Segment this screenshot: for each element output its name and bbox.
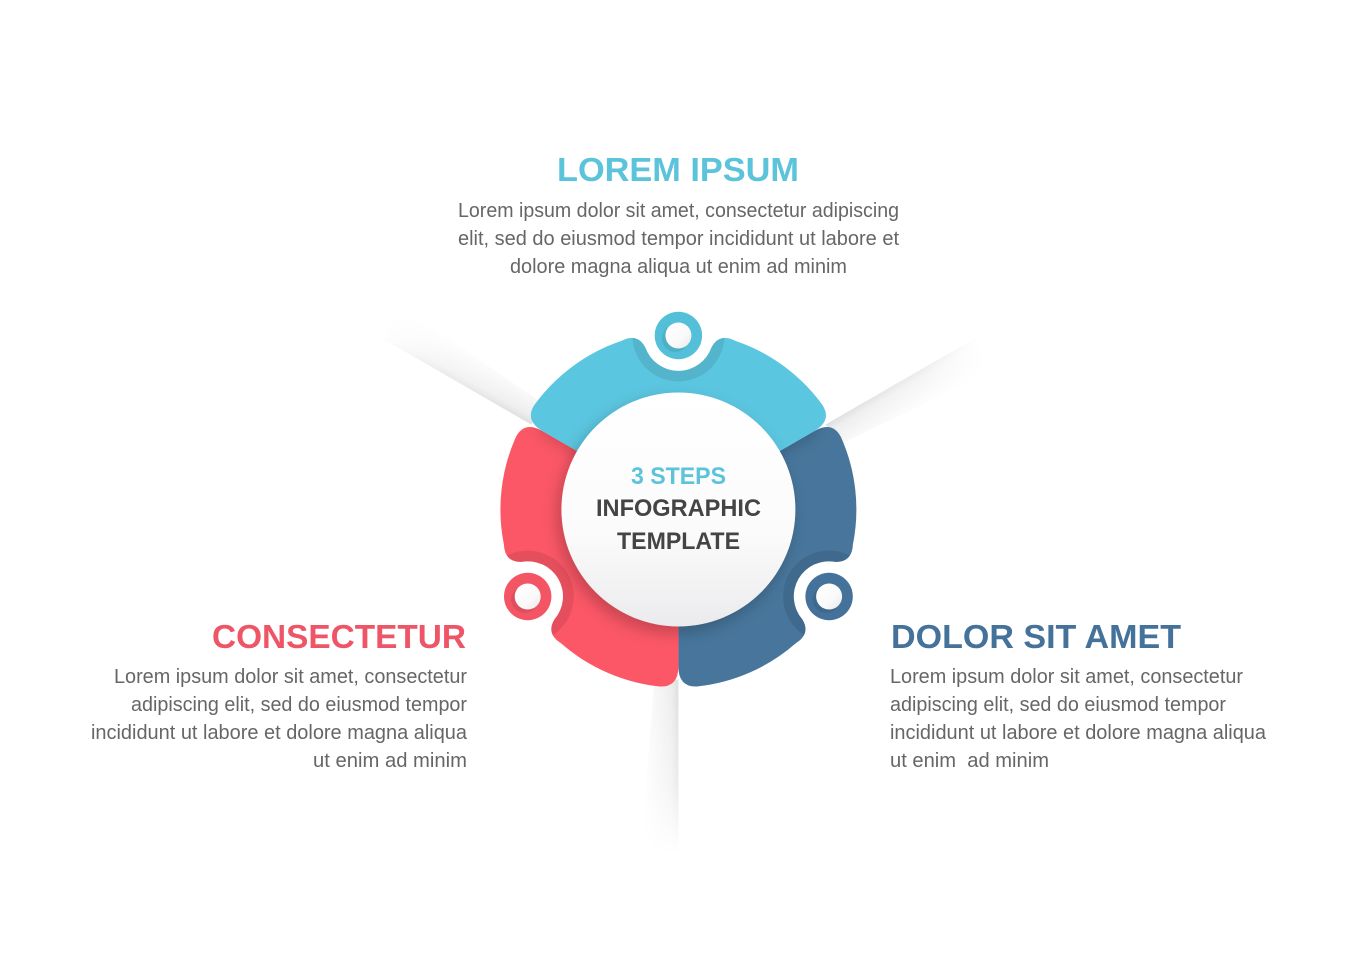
heading and description: dolor sit amet: adipiscing elit, sed do eiusmod tempor — [890, 694, 1226, 716]
ring icon: cyan — [655, 312, 702, 359]
center text: 3 STEPS — [631, 463, 726, 490]
heading and description: dolor sit amet: DOLOR SIT AMET — [891, 618, 1181, 655]
heading and description: lorem ipsum: dolore magna aliqua ut enim ad minim — [510, 256, 847, 278]
center circle — [561, 392, 795, 626]
heading and description: consectetur: adipiscing elit, sed do eiusmod tempor — [131, 694, 467, 716]
heading and description: dolor sit amet — [890, 618, 1267, 772]
heading and description: lorem ipsum: elit, sed do eiusmod tempor incididunt ut labore et — [458, 228, 899, 250]
heading and description: consectetur — [91, 618, 468, 772]
heading and description: dolor sit amet: ut enim ad minim — [890, 750, 1049, 772]
shadow ray: bottom — [656, 680, 678, 824]
heading and description: lorem ipsum: Lorem ipsum dolor sit amet, consectetur adipiscing — [458, 200, 899, 222]
segment: cyan — [530, 338, 826, 451]
heading and description: lorem ipsum: LOREM IPSUM — [557, 151, 799, 188]
segment: red — [500, 427, 678, 686]
heading and description: consectetur: incididunt ut labore et dolore magna aliqua — [91, 722, 468, 744]
circular diagram — [406, 312, 951, 824]
ring icon: dark blue — [805, 573, 853, 620]
heading and description: consectetur: Lorem ipsum dolor sit amet, consectetur — [114, 666, 467, 688]
heading and description: dolor sit amet: Lorem ipsum dolor sit amet, consectetur — [890, 666, 1243, 688]
heading and description: consectetur: CONSECTETUR — [212, 618, 466, 655]
segment: dark blue — [678, 427, 856, 686]
infographic canvas — [92, 158, 1266, 824]
center text: TEMPLATE — [617, 528, 740, 555]
center text — [596, 463, 761, 555]
heading and description: dolor sit amet: incididunt ut labore et dolore magna aliqua — [890, 722, 1267, 744]
heading and description: lorem ipsum — [458, 151, 899, 278]
segment: cyan shadow on lower segments — [534, 428, 819, 458]
center text: INFOGRAPHIC — [596, 495, 761, 522]
center circle shadow — [556, 398, 792, 634]
shadow ray: upper right — [826, 352, 951, 440]
ring icon: red — [504, 573, 551, 620]
heading and description: consectetur: ut enim ad minim — [313, 750, 467, 772]
shadow ray: upper left — [406, 352, 536, 424]
